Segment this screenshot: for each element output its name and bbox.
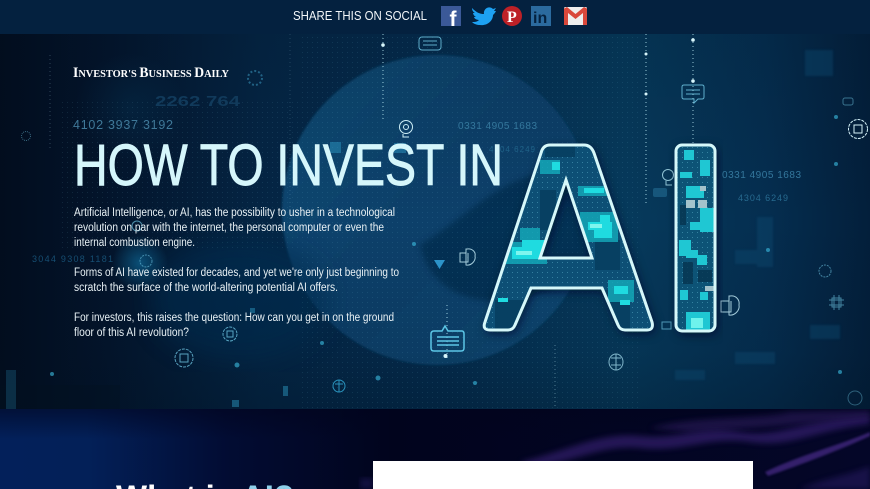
icon: bottom right xyxy=(848,391,862,405)
paragraph 3: floor of this AI revolution? xyxy=(74,327,189,339)
icon: brain robot xyxy=(460,249,475,265)
icon: brain text overlay xyxy=(132,221,142,231)
paragraph 3 xyxy=(74,312,394,339)
decorative numbers: 4304 6249 xyxy=(489,145,536,154)
paragraph 1: Artificial Intelligence, or AI, has the possibility to usher in a technological xyxy=(74,207,395,219)
hero background xyxy=(0,34,870,409)
decorative numbers: 0331 4905 1683 xyxy=(458,121,537,132)
decorative numbers xyxy=(32,93,801,264)
icon: chip middle xyxy=(223,327,237,341)
icon: gmail xyxy=(564,7,587,25)
top social bar xyxy=(0,0,870,34)
paragraph 2: Forms of AI have existed for decades, and yet we're only just beginning to xyxy=(74,267,399,279)
paragraph 3: For investors, this raises the question: How can you get in on the ground xyxy=(74,312,394,324)
paragraph 2: scratch the surface of the world-altering potential AI offers. xyxy=(74,282,338,294)
icon: pinterest: P xyxy=(507,9,517,26)
icon: facebook xyxy=(441,6,461,31)
decorative numbers: 0331 4905 1683 xyxy=(722,170,801,181)
decorative numbers: 4102 3937 3192 xyxy=(73,118,173,132)
icon: chat bubble right xyxy=(682,85,704,103)
icon: twitter xyxy=(472,7,496,25)
icon: triangle marker xyxy=(434,260,445,269)
decorative numbers: 3044 9308 1181 xyxy=(32,254,113,264)
icon: linkedin: in xyxy=(533,10,547,27)
paragraph 1: revolution on par with the internet, the personal computer or even the xyxy=(74,222,384,234)
white content panel xyxy=(373,461,753,489)
icon: head right xyxy=(662,170,674,185)
paragraph 1: internal combustion engine. xyxy=(74,237,195,249)
icon: chip far right xyxy=(829,295,844,310)
icon: chat near A xyxy=(653,188,667,197)
intro text xyxy=(74,207,399,339)
paragraph 2 xyxy=(74,267,399,294)
icon: brain logo side xyxy=(248,71,262,85)
icon: chat bubble top xyxy=(419,37,441,50)
scattered circuit-brain icons xyxy=(22,37,868,405)
background: lower section xyxy=(0,409,870,489)
icon: chat far right xyxy=(843,98,853,105)
letter I xyxy=(676,145,715,331)
paragraph 1 xyxy=(74,207,395,249)
title: HOW TO INVEST IN xyxy=(74,133,503,198)
decorative numbers: 4304 6249 xyxy=(738,193,788,203)
icon: brain lower center xyxy=(609,354,623,370)
letter A xyxy=(480,140,660,335)
icon: linkedin xyxy=(531,6,551,27)
icon: brain low xyxy=(140,255,152,267)
big AI letters xyxy=(480,140,715,335)
icon: facebook: f xyxy=(450,8,458,31)
icon: briefcase xyxy=(662,322,671,329)
icon: head xyxy=(400,120,412,137)
decorative numbers: 2262 764 xyxy=(155,93,241,110)
icon: brain left xyxy=(22,132,30,140)
icon: brain bottom xyxy=(333,380,345,392)
icon: brain right of A xyxy=(721,296,739,315)
icon: chip lower left xyxy=(175,349,193,367)
icon: chip right edge xyxy=(848,120,868,138)
share label: SHARE THIS ON SOCIAL xyxy=(293,9,427,23)
icon: large chat bubble xyxy=(431,326,464,351)
logo: Investor's Business Daily: INVESTOR'S BUSINESS DAILY xyxy=(73,65,229,81)
icon: pinterest xyxy=(502,6,522,26)
icon: brain far right xyxy=(819,265,831,277)
